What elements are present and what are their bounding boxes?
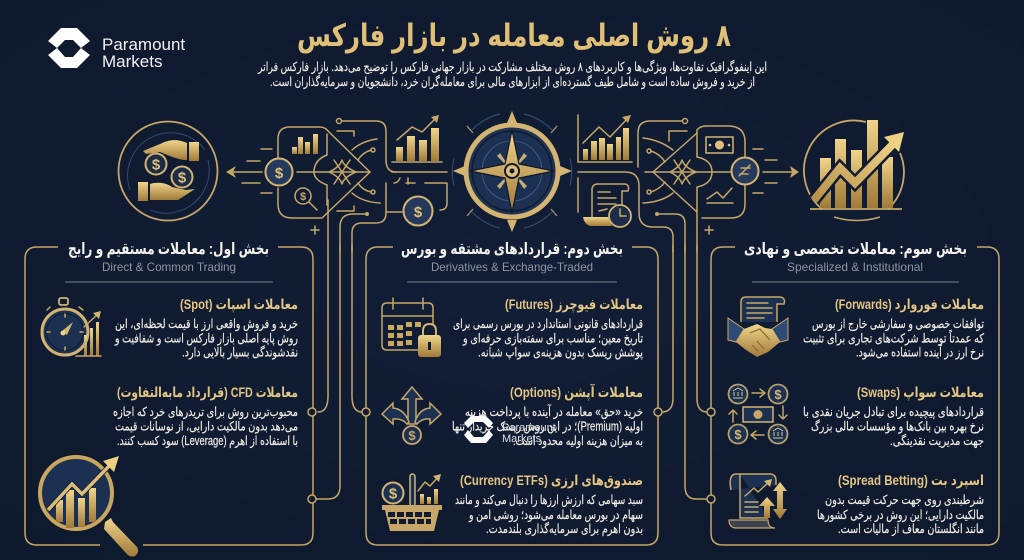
panel: derivatives and exchange-traded bbox=[362, 241, 662, 545]
item: currency etfs: صندوق‌های ارزی (Currency ETFs) bbox=[460, 472, 643, 489]
icon: left coin bbox=[266, 158, 292, 186]
item: spread betting: شرطبندی روی جهت حرکت قیمت بدون bbox=[825, 493, 984, 508]
logo: Paramount Markets bbox=[48, 28, 185, 71]
item: spread betting bbox=[817, 472, 984, 537]
left circuit: $ bbox=[300, 191, 306, 203]
item: cfd: با استفاده از اهرم (Leverage) سود کسب کنند. bbox=[117, 434, 298, 449]
subheading: section three: Specialized & Institutional bbox=[787, 260, 923, 274]
item: swaps: قراردادهای پیچیده برای تبادل جریان نقدی با bbox=[803, 405, 984, 420]
icon: branching arrows with coin bbox=[382, 387, 441, 444]
item: futures: قراردادهای قانونی استاندارد در بورس رسمی برای bbox=[453, 317, 643, 332]
icon: contract and clock bbox=[583, 184, 631, 227]
intro text bbox=[257, 59, 767, 90]
chart: right rising bars bbox=[578, 115, 632, 162]
icon: scroll with chart and arrows bbox=[729, 474, 787, 528]
icon: basket with coin and chart bbox=[382, 474, 442, 531]
item: futures: پوشش ریسک بدون هزینه‌ی سواپ شبانه. bbox=[478, 346, 643, 360]
item: options: اولیه (Premium)؛ در این روش ریسک خریدار تنها bbox=[452, 420, 643, 434]
item: swaps bbox=[803, 384, 984, 449]
left circuit bbox=[226, 118, 447, 252]
icon: right coin bbox=[732, 158, 758, 184]
icon: calendar with lock bbox=[382, 298, 441, 357]
icon: basket with coin and chart: $ bbox=[389, 486, 398, 502]
icon: rising chart in circle bbox=[804, 120, 904, 220]
item: cfd: محبوب‌ترین روش برای تریدرهای خرد که اجازه bbox=[113, 405, 298, 420]
icon: lower coin: $ bbox=[414, 204, 423, 221]
item: spot: معاملات اسپات (Spot) bbox=[180, 296, 298, 313]
icon: hands exchanging coins: $ bbox=[178, 170, 187, 186]
icon: compass bbox=[452, 111, 572, 232]
right circuit bbox=[578, 118, 799, 252]
heading: section two: بخش دوم: قراردادهای مشتقه و بورس bbox=[401, 241, 623, 258]
item: spot: نقدشوندگی بسیار بالایی دارد. bbox=[182, 344, 298, 360]
item: futures: تاریخ معین؛ مناسب برای سفته‌بازی حرفه‌ای و bbox=[462, 332, 643, 346]
chart: left rising bars bbox=[392, 115, 442, 162]
icon: magnifier with chart bbox=[40, 456, 138, 557]
item: swaps: معاملات سواپ (Swaps) bbox=[857, 384, 984, 401]
watermark logo: Markets bbox=[502, 433, 542, 445]
watermark logo: Paramount bbox=[502, 422, 556, 434]
connectors to panels bbox=[316, 200, 707, 499]
logo: Paramount Markets: Paramount bbox=[102, 35, 185, 54]
logo: Paramount Markets: Markets bbox=[102, 52, 162, 71]
icon: swap cycle bbox=[728, 384, 788, 444]
icon: lower coin bbox=[404, 196, 432, 226]
item: currency etfs: بدون اهرم برای سرمایه‌گذاری بلندمدت. bbox=[486, 521, 643, 537]
watermark logo bbox=[464, 416, 556, 445]
item: spot: روش پایه اصلی بازار فارکس است و شفافیت و bbox=[114, 332, 298, 346]
icon: hands exchanging coins: $ bbox=[152, 156, 161, 174]
item: futures: معاملات فیوچرز (Futures) bbox=[505, 296, 643, 313]
item: cfd bbox=[113, 384, 298, 449]
item: options: به میزان هزینه اولیه محدود است. bbox=[513, 434, 643, 449]
subheading: section two: Derivatives & Exchange-Traded bbox=[431, 260, 593, 274]
item: forwards bbox=[803, 296, 984, 360]
item: options: معاملات آپشن (Options) bbox=[510, 383, 643, 401]
heading: section one: بخش اول: معاملات مستقیم و رایج bbox=[68, 241, 269, 258]
item: futures bbox=[453, 296, 643, 360]
icon: stopwatch bbox=[42, 298, 101, 356]
item: currency etfs: سبد سهامی که ارزش ارزها را دنبال می‌کند و مانند bbox=[455, 493, 643, 508]
item: cfd: می‌دهد بدون مالکیت دارایی، از نوسانات قیمت bbox=[115, 420, 298, 434]
icon: swap cycle: $ bbox=[734, 427, 742, 442]
item: currency etfs: سهام در بورس معامله می‌شود؛ روشی امن و bbox=[468, 508, 643, 523]
item: spread betting: اسپرد بت (Spread Betting) bbox=[838, 472, 984, 489]
item: forwards: معاملات فوروارد (Forwards) bbox=[835, 296, 984, 313]
item: options: خرید «حق» معامله در آینده با پرداخت هزینه bbox=[465, 404, 643, 420]
intro text: این اینفوگرافیک تفاوت‌ها، ویژگی‌ها و کاربردهای ۸ روش مختلف مشارکت در بازار جهانی فارکس را توضیح می‌دهد. بازار فارکس فراتر bbox=[257, 59, 767, 75]
icon: swap cycle: $ bbox=[774, 387, 782, 402]
item: options bbox=[452, 383, 643, 449]
subheading: section one: Direct & Common Trading bbox=[102, 260, 236, 274]
item: spread betting: مانند انگلستان معاف از مالیات است. bbox=[838, 521, 984, 537]
item: forwards: نرخ ارز در آینده استفاده می‌شود. bbox=[856, 344, 984, 360]
item: spot bbox=[114, 296, 298, 360]
panel: direct and common trading bbox=[25, 241, 316, 557]
intro text: از خرید و فروش ساده است و شامل طیف گسترده‌ای از ابزارهای مالی برای معامله‌گران خرد، دانشجویان و سرمایه‌گذاران است. bbox=[270, 74, 755, 90]
icon: left coin: $ bbox=[275, 165, 284, 182]
title: ۸ روش اصلی معامله در بازار فارکس bbox=[297, 18, 731, 54]
icon: hands exchanging coins bbox=[118, 122, 218, 220]
item: spot: خرید و فروش واقعی ارز با قیمت لحظه‌ای، این bbox=[115, 317, 298, 332]
item: cfd: معاملات CFD (قرارداد مابه‌التفاوت) bbox=[117, 384, 298, 401]
icon: handshake with contract bbox=[728, 297, 788, 357]
item: currency etfs bbox=[455, 472, 643, 537]
panel: specialized and institutional bbox=[707, 241, 999, 545]
icon: branching arrows with coin: $ bbox=[408, 428, 416, 443]
item: swaps: جهت مدیریت نقدینگی. bbox=[890, 433, 984, 449]
